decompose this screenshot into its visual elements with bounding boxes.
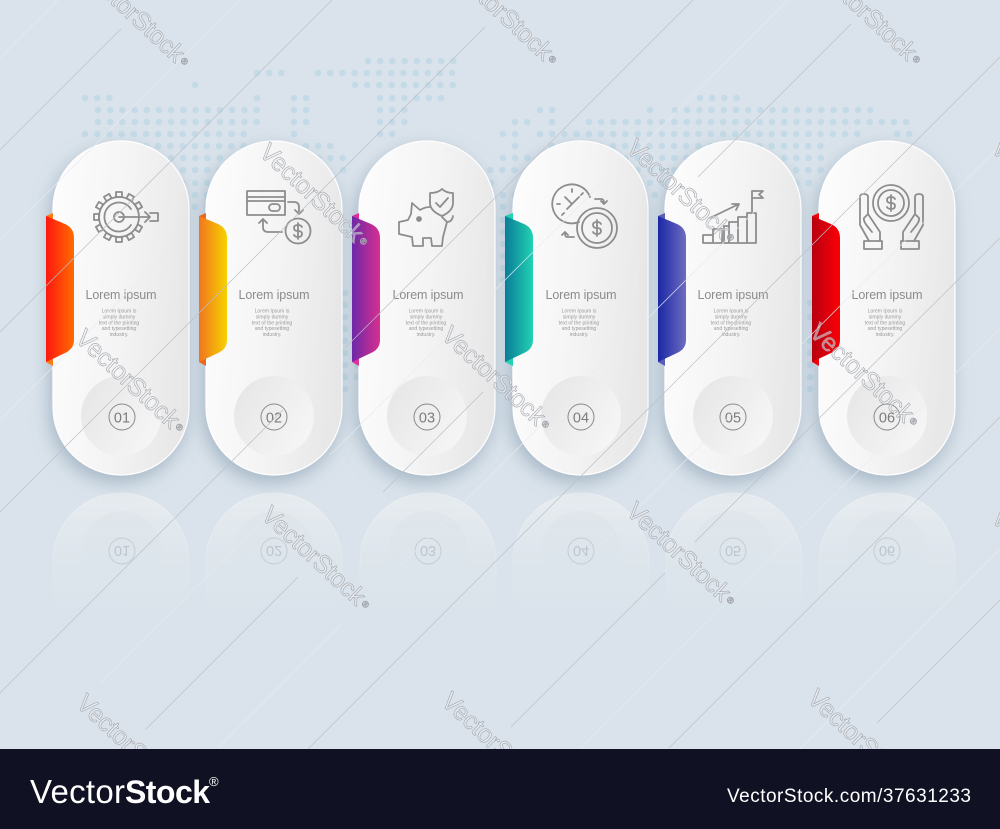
watermarks: VectorStock [621, 134, 736, 244]
panel: step 05 [658, 141, 801, 475]
reflection 03 [360, 493, 496, 622]
number disc [693, 376, 773, 456]
icon: card and coin exchange [247, 191, 310, 244]
body text: text of the printing [406, 320, 446, 326]
reflection 05: 05 [725, 542, 741, 558]
body text: simply dummy [715, 314, 748, 320]
body text: text of the printing [99, 320, 139, 326]
card body [819, 141, 955, 475]
body text: text of the printing [252, 320, 292, 326]
footer logo: ® [209, 774, 219, 789]
body text: Lorem Ipsum is [255, 308, 290, 314]
watermarks: ® [539, 784, 551, 796]
ribbon [658, 213, 686, 366]
heading: Lorem ipsum [392, 288, 464, 302]
footer logo: Vector [30, 773, 125, 810]
heading: Lorem ipsum [86, 288, 156, 302]
body text: simply dummy [869, 314, 902, 320]
number disc [387, 376, 467, 456]
number disc [81, 376, 161, 456]
ribbon [505, 213, 533, 366]
watermarks: ® [907, 415, 919, 427]
watermarks: VectorStock [804, 318, 919, 428]
reflection 02: 02 [266, 542, 282, 558]
body text: Lorem Ipsum is [562, 308, 597, 314]
watermarks: ® [724, 231, 736, 243]
reflection 01: 01 [114, 542, 130, 558]
watermarks: ® [910, 53, 922, 65]
footer logo [30, 773, 219, 810]
ribbon [812, 213, 840, 366]
number disc: 02 [266, 410, 282, 426]
footer logo: Stock [125, 774, 210, 810]
watermarks: ® [357, 235, 369, 247]
body text: text of the printing [559, 320, 599, 326]
watermarks: ® [359, 598, 371, 610]
reflection 06 [819, 493, 955, 622]
icon: clock and coin [552, 184, 617, 248]
number disc: 04 [573, 410, 589, 426]
number disc: 03 [419, 410, 435, 426]
footer bar [0, 749, 1000, 829]
reflection 03: 03 [420, 542, 436, 558]
card body [513, 141, 648, 475]
heading: Lorem ipsum [546, 288, 616, 302]
body text: text of the printing [711, 320, 751, 326]
reflection 05 [666, 493, 802, 622]
reflection 06: 06 [879, 542, 895, 558]
body text: and typesetting [409, 326, 443, 332]
body text: Lorem Ipsum is [714, 308, 749, 314]
body text: Lorem Ipsum is [102, 308, 137, 314]
watermarks: VectorStock [256, 501, 371, 611]
watermarks: ® [724, 594, 736, 606]
panel: step 02 [199, 141, 342, 475]
heading: Lorem ipsum [852, 288, 922, 302]
watermarks: ® [174, 786, 186, 798]
body text: Lorem Ipsum is [409, 308, 444, 314]
watermarks: ® [539, 418, 551, 430]
number disc: 06 [879, 410, 895, 426]
watermarks: VectorStock [70, 324, 185, 434]
panel: step 01 [46, 141, 189, 475]
panel: step 03 [352, 141, 495, 475]
icon: piggy bank with shield [399, 189, 453, 246]
body text: and typesetting [102, 326, 136, 332]
body text: and typesetting [562, 326, 596, 332]
ribbon [46, 213, 74, 366]
watermarks: ® [546, 53, 558, 65]
watermarks: ® [173, 421, 185, 433]
panel: step 04 [505, 141, 648, 475]
number disc [847, 376, 927, 456]
body text: simply dummy [103, 314, 136, 320]
heading: Lorem ipsum [698, 288, 768, 302]
reflection 04: 04 [573, 542, 589, 558]
ribbon [352, 213, 380, 366]
body text: industry. [110, 332, 128, 338]
number disc [234, 376, 314, 456]
icon: growth bars with flag [703, 191, 763, 243]
watermarks: VectorStock [436, 321, 551, 431]
dotted world map [85, 61, 910, 389]
reflections of the cards [53, 493, 955, 622]
body text: industry. [570, 332, 588, 338]
card body [665, 141, 801, 475]
reflection 02 [206, 493, 342, 622]
watermarks: VectorStock [802, 684, 917, 794]
number disc [541, 376, 621, 456]
body text: simply dummy [563, 314, 596, 320]
footer image id: VectorStock.com/37631233 [727, 786, 971, 807]
body text: and typesetting [868, 326, 902, 332]
card body [359, 141, 495, 475]
watermarks: ® [905, 781, 917, 793]
reflection 01 [53, 493, 189, 622]
body text: industry. [263, 332, 281, 338]
body text: industry. [417, 332, 435, 338]
body text: industry. [876, 332, 894, 338]
body text: simply dummy [256, 314, 289, 320]
card body [206, 141, 342, 475]
reflection 04 [513, 493, 649, 622]
body text: and typesetting [714, 326, 748, 332]
card body [53, 141, 189, 475]
number disc: 05 [725, 410, 741, 426]
body text: Lorem Ipsum is [868, 308, 903, 314]
body text: simply dummy [410, 314, 443, 320]
ribbon [199, 213, 227, 366]
watermarks: ® [178, 55, 190, 67]
body text: industry. [722, 332, 740, 338]
number disc: 01 [114, 410, 130, 426]
watermarks: VectorStock [254, 138, 369, 248]
watermarks: VectorStock [621, 497, 736, 607]
watermarks: VectorStock [436, 687, 551, 797]
panel: step 06 [812, 141, 955, 475]
icon: gear with target and arrow [94, 192, 158, 242]
body text: and typesetting [255, 326, 289, 332]
body text: text of the printing [865, 320, 905, 326]
heading: Lorem ipsum [238, 288, 310, 302]
watermarks: VectorStock [71, 689, 186, 799]
icon: hands holding coin [860, 185, 923, 249]
